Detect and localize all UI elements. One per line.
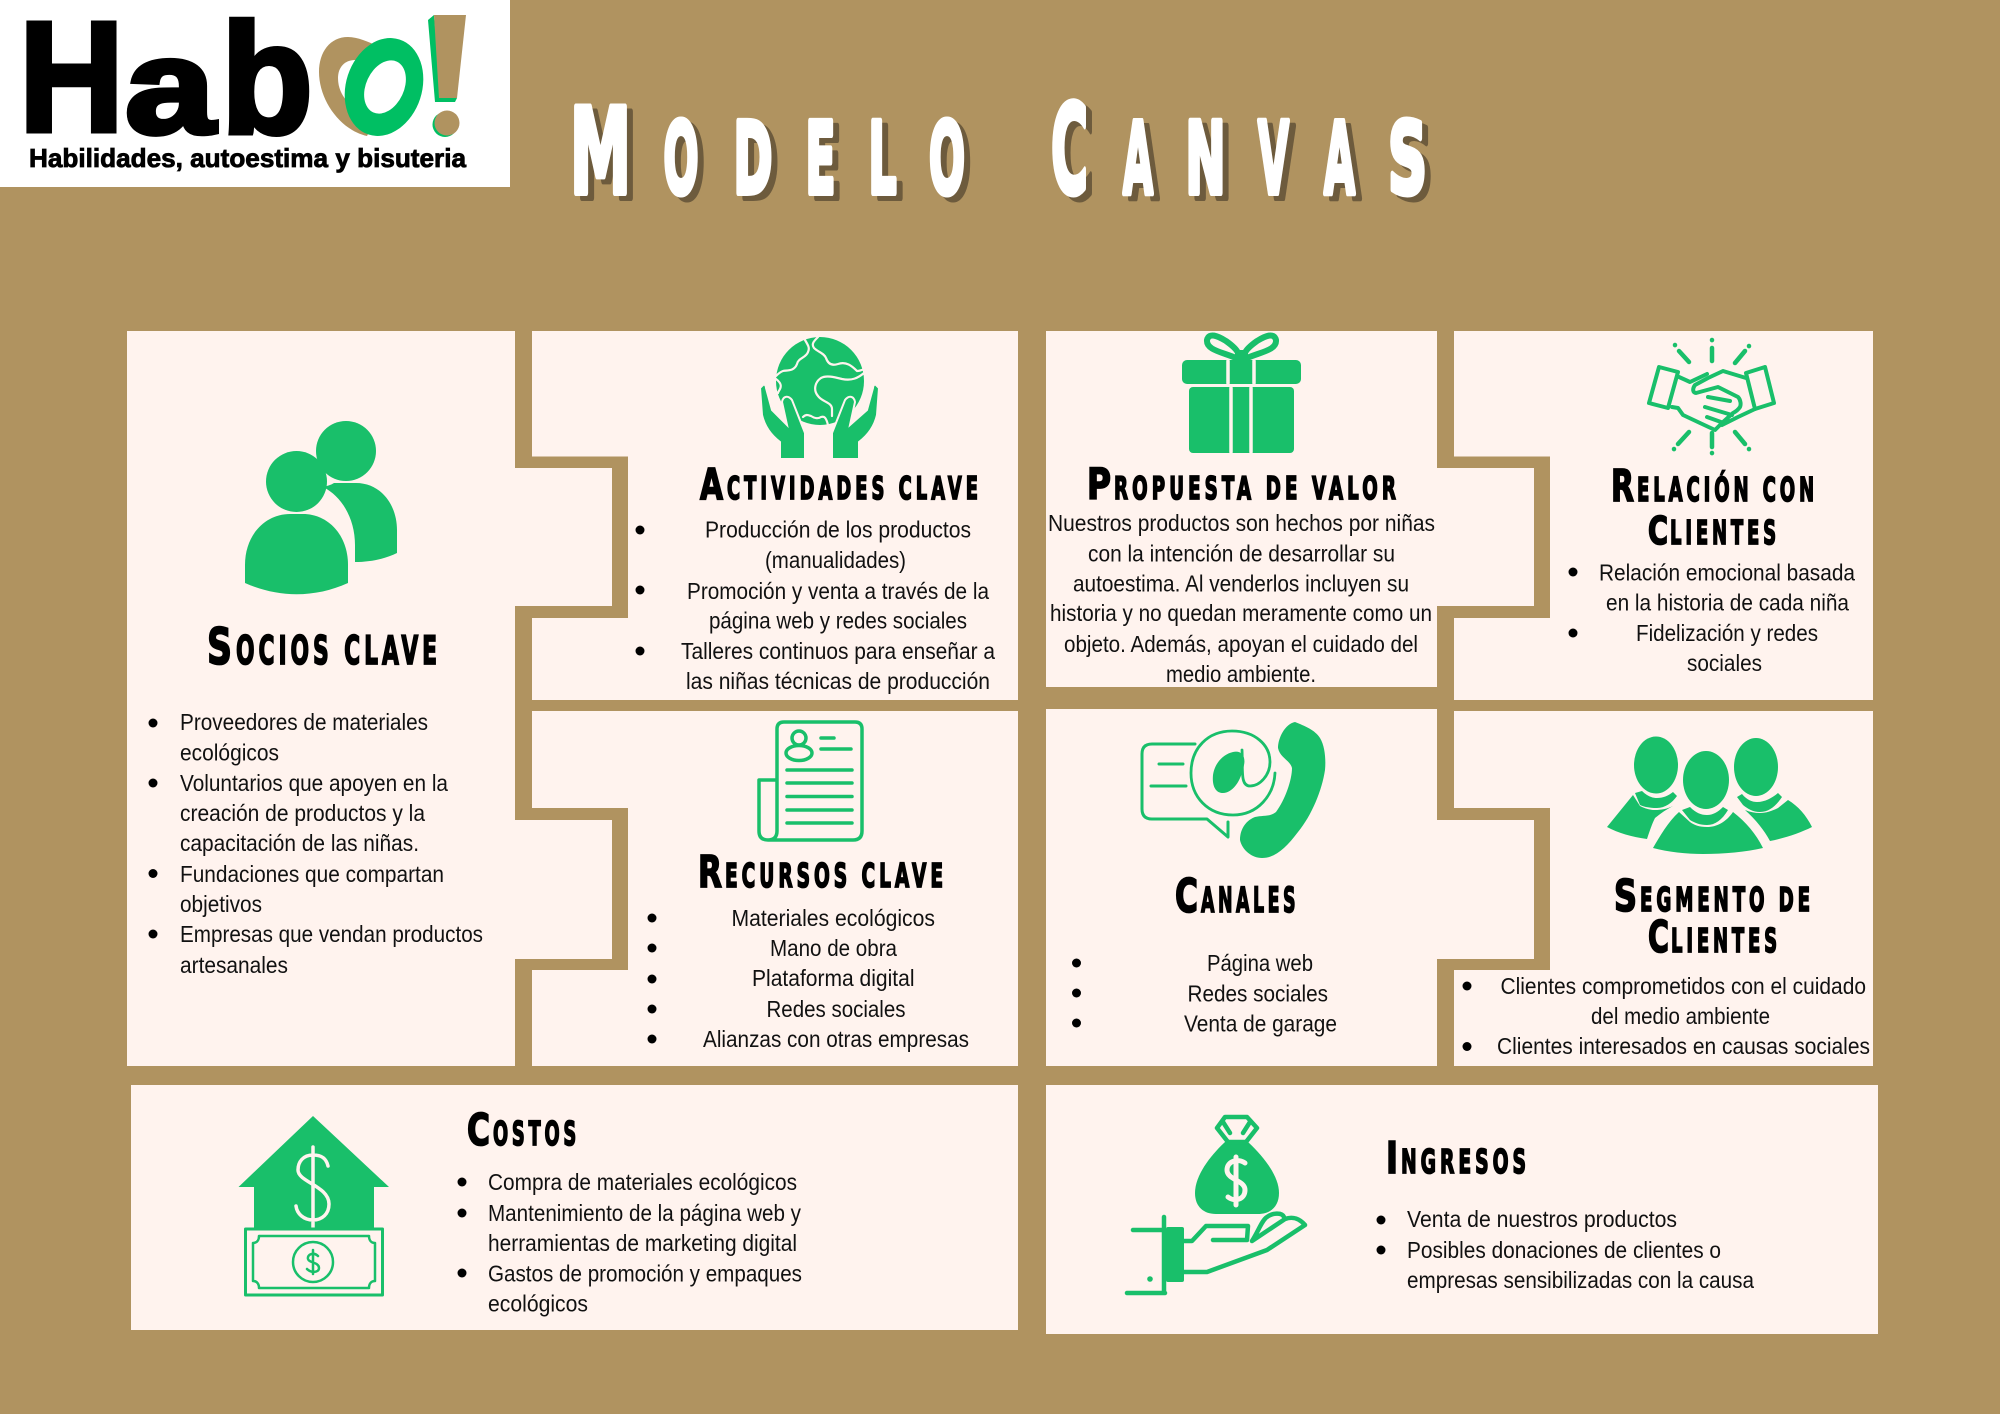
- bullet list: [648, 905, 969, 1052]
- logo: Habilidades, autoestima y bisuteria: [29, 143, 467, 173]
- panel: relacion con clientes: [1454, 331, 1873, 700]
- title: S: [1388, 102, 1427, 217]
- bullet list: Mano de obra: [770, 935, 897, 961]
- title: D: [734, 102, 772, 217]
- bullet list: Relación emocional basada: [1599, 560, 1855, 586]
- bullet list: [1376, 1206, 1754, 1293]
- bullet list: Materiales ecológicos: [732, 905, 935, 931]
- panel: canales: ANALES: [1201, 881, 1299, 921]
- title: M: [570, 84, 631, 222]
- heading: ECURSOS CLAVE: [725, 856, 947, 895]
- heading: LIENTES: [1671, 921, 1781, 960]
- heading: A: [700, 460, 723, 510]
- icon: two people: [245, 421, 397, 594]
- bullet list: [1462, 973, 1870, 1059]
- heading: C: [1175, 869, 1198, 923]
- heading: R: [1611, 461, 1634, 512]
- bullet list: Redes sociales: [1188, 980, 1328, 1006]
- icon: globe in hands: [760, 337, 879, 459]
- bullet list: Voluntarios que apoyen en la: [180, 770, 448, 796]
- bullet list: sociales: [1687, 650, 1762, 676]
- bullet list: empresas sensibilizadas con la causa: [1407, 1267, 1754, 1293]
- bullet list: Compra de materiales ecológicos: [488, 1169, 797, 1195]
- bullet list: ecológicos: [488, 1290, 588, 1316]
- bullet list: Alianzas con otras empresas: [703, 1026, 969, 1052]
- bullet list: (manualidades): [765, 547, 906, 573]
- heading: CTIVIDADES CLAVE: [727, 471, 982, 507]
- title: E: [806, 102, 836, 217]
- bullet list: Talleres continuos para enseñar a: [681, 638, 995, 664]
- heading: OCIOS CLAVE: [236, 629, 441, 674]
- description text: objeto. Además, apoyan el cuidado del: [1064, 631, 1418, 657]
- bullet list: Mantenimiento de la página web y: [488, 1200, 801, 1226]
- bullet list: ecológicos: [180, 740, 279, 766]
- bullet list: creación de productos y la: [180, 800, 425, 826]
- bullet list: Posibles donaciones de clientes o: [1407, 1237, 1721, 1263]
- heading: OSTOS: [493, 1114, 580, 1153]
- panel: socios clave: [127, 331, 612, 1066]
- logo: a: [125, 11, 216, 162]
- panel: actividades clave: [532, 331, 1018, 700]
- bullet list: Fundaciones que compartan: [180, 861, 444, 887]
- title: O: [664, 102, 698, 217]
- title: A: [1123, 102, 1153, 217]
- bullet list: las niñas técnicas de producción: [686, 668, 990, 694]
- heading: [1611, 461, 1818, 553]
- heading: S: [1614, 871, 1637, 922]
- bullet list: Gastos de promoción y empaques: [488, 1260, 802, 1286]
- bullet list: [458, 1169, 802, 1316]
- bullet list: Redes sociales: [766, 996, 906, 1022]
- heading: LIENTES: [1670, 513, 1780, 552]
- icon: document with person: [759, 722, 862, 840]
- heading: C: [1648, 912, 1669, 963]
- bullet list: artesanales: [180, 952, 288, 978]
- heading: [1614, 871, 1814, 963]
- heading: EGMENTO DE: [1640, 880, 1814, 919]
- bullet list: Clientes comprometidos con el cuidado: [1500, 973, 1866, 999]
- bullet list: capacitación de las niñas.: [180, 830, 419, 856]
- bullet list: Clientes interesados en causas sociales: [1497, 1033, 1870, 1059]
- bullet list: Proveedores de materiales: [180, 709, 428, 735]
- bullet list: Plataforma digital: [752, 965, 914, 991]
- heading: ROPUESTA DE VALOR: [1114, 471, 1400, 507]
- panel: segmento de clientes: [1454, 711, 1873, 1066]
- bullet list: del medio ambiente: [1591, 1003, 1770, 1029]
- bullet list: objetivos: [180, 891, 262, 917]
- bullet list: Empresas que vendan productos: [180, 921, 483, 947]
- heading: I: [1386, 1133, 1398, 1184]
- icon: gift box: [1182, 335, 1301, 453]
- bullet list: Venta de nuestros productos: [1407, 1206, 1677, 1232]
- title: O: [929, 102, 965, 217]
- title: L: [868, 102, 896, 217]
- bullet list: Fidelización y redes: [1636, 620, 1818, 646]
- heading: NGRESOS: [1401, 1142, 1530, 1181]
- title: N: [1186, 102, 1226, 217]
- bullet list: Producción de los productos: [705, 516, 971, 542]
- bullet list: Página web: [1207, 950, 1313, 976]
- panel: canales: [1046, 709, 1534, 1066]
- bullet list: Venta de garage: [1184, 1010, 1337, 1036]
- heading: C: [1648, 509, 1668, 553]
- heading: R: [698, 847, 722, 898]
- description text: con la intención de desarrollar su: [1088, 540, 1395, 566]
- panel: costos: [131, 1085, 1018, 1330]
- bullet list: [148, 709, 483, 978]
- icon: chat, at sign and phone: [1142, 722, 1325, 858]
- title: [570, 80, 1427, 223]
- panel: recursos clave: [532, 711, 1018, 1066]
- title: C: [1051, 80, 1088, 223]
- description text: Nuestros productos son hechos por niñas: [1048, 510, 1435, 536]
- heading: C: [467, 1105, 490, 1156]
- icon: three people: [1607, 736, 1812, 854]
- logo: [0, 0, 510, 187]
- title: V: [1258, 102, 1289, 217]
- description text: [1048, 510, 1435, 687]
- bullet list: [1568, 560, 1855, 676]
- bullet list: herramientas de marketing digital: [488, 1230, 797, 1256]
- heading: ELACIÓN CON: [1637, 469, 1818, 509]
- bullet list: en la historia de cada niña: [1606, 590, 1849, 616]
- heading: P: [1087, 460, 1111, 510]
- icon: house with dollar bill: [238, 1116, 389, 1295]
- title: A: [1324, 102, 1355, 217]
- panel: propuesta de valor: [1046, 331, 1534, 687]
- description text: medio ambiente.: [1166, 661, 1316, 687]
- icon: hand holding money bag: [1127, 1117, 1305, 1293]
- description text: historia y no quedan meramente como un: [1050, 600, 1432, 626]
- bullet list: Promoción y venta a través de la: [687, 578, 989, 604]
- bullet list: página web y redes sociales: [709, 608, 967, 634]
- panel: ingresos: [1046, 1085, 1878, 1334]
- description text: autoestima. Al venderlos incluyen su: [1073, 570, 1409, 596]
- heading: S: [207, 618, 232, 676]
- bullet list: [636, 516, 995, 694]
- bullet list: [1072, 950, 1337, 1036]
- icon: handshake: [1649, 340, 1774, 453]
